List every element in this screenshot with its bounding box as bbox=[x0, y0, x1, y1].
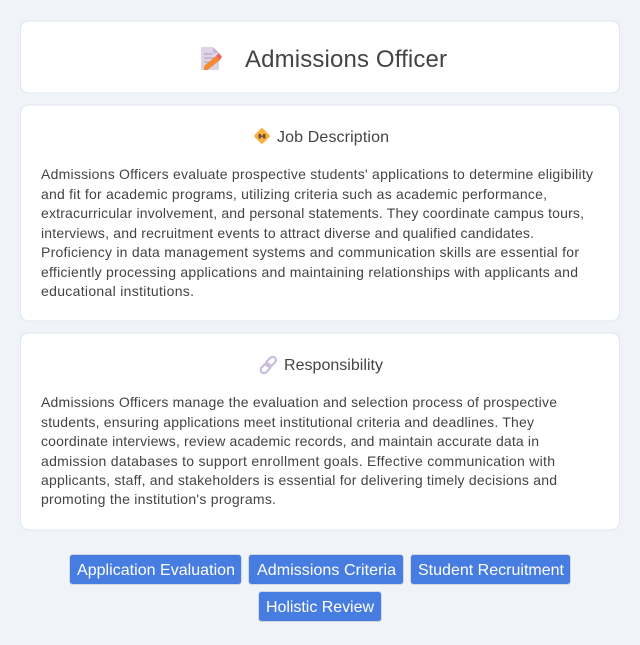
text block: responsibility bbox=[41, 394, 557, 507]
text block: job description: extracurricular involvement, and personal statements. They coordinate campus tours, bbox=[41, 205, 584, 221]
text block: responsibility: Admissions Officers manage the evaluation and selection process of prospective bbox=[41, 394, 557, 410]
tag: student recruitment: Student Recruitment bbox=[418, 562, 565, 579]
panel: title card bbox=[20, 21, 620, 93]
heading: job description: Job Description bbox=[277, 129, 389, 146]
text block: job description: efficiently processing applications and maintaining relationships with applicants and bbox=[41, 264, 578, 280]
panel: job description bbox=[20, 105, 620, 321]
tag: holistic review: Holistic Review bbox=[266, 599, 374, 616]
heading: responsibility: Responsibility bbox=[284, 357, 383, 374]
text block: responsibility: applicants, staff, and stakeholders is essential for delivering timely decisions and bbox=[41, 472, 557, 488]
text block: responsibility: coordinate interviews, review academic records, and maintain accurate data in bbox=[41, 433, 539, 449]
text block: job description: and fit for academic programs, utilizing criteria such as academic performance, bbox=[41, 186, 547, 202]
tag: admissions criteria: Admissions Criteria bbox=[257, 562, 396, 579]
tag: application evaluation: Application Evaluation bbox=[77, 562, 235, 579]
title: Admissions Officer bbox=[245, 46, 447, 73]
icon: chain link bbox=[259, 356, 277, 374]
text block: job description: educational institutions. bbox=[41, 283, 194, 299]
text block: responsibility: admission databases to support enrollment goals. Effective communication with bbox=[41, 453, 555, 469]
icon: orange diamond bbox=[254, 128, 270, 144]
text block: job description: Proficiency in data management systems and communication skills are essential for bbox=[41, 244, 579, 260]
text block: job description: interviews, and recruitment events to attract diverse and qualified candidates. bbox=[41, 225, 534, 241]
text block: job description bbox=[41, 166, 593, 299]
text block: responsibility: students, ensuring applications meet institutional criteria and deadlines. They bbox=[41, 414, 534, 430]
tag: student recruitment bbox=[410, 554, 570, 584]
text block: responsibility: promoting the institution's programs. bbox=[41, 491, 276, 507]
tag: holistic review bbox=[258, 592, 382, 622]
icon: document with pencil bbox=[201, 47, 222, 70]
tag: application evaluation bbox=[70, 554, 242, 584]
tag: admissions criteria bbox=[248, 554, 404, 584]
text block: job description: Admissions Officers evaluate prospective students' applications to determine eligibility bbox=[41, 166, 593, 182]
panel: responsibility bbox=[20, 333, 620, 530]
